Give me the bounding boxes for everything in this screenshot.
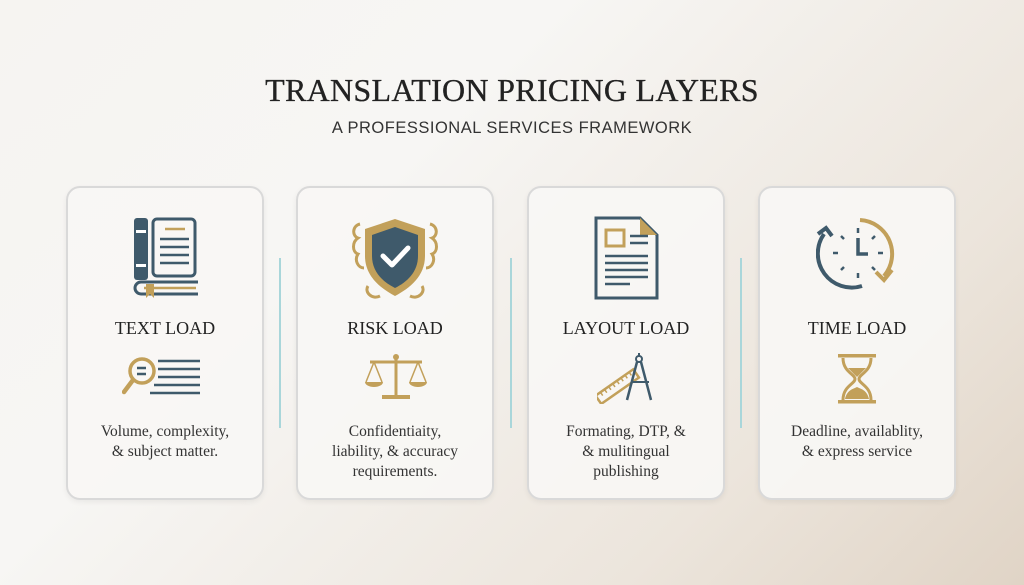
- heading: TIME LOAD: [808, 318, 906, 338]
- panel: time load: [758, 186, 956, 500]
- description: & mulitingual: [582, 443, 670, 460]
- icon: document layout: [594, 216, 658, 300]
- divider: [740, 258, 742, 428]
- description: liability, & accuracy: [332, 443, 458, 460]
- title: TRANSLATION PRICING LAYERS: [265, 72, 759, 108]
- icon: magnifier with lines: [122, 357, 200, 394]
- description: Formating, DTP, &: [566, 423, 686, 440]
- heading: TEXT LOAD: [115, 318, 215, 338]
- description: publishing: [593, 463, 659, 480]
- description: requirements.: [353, 463, 437, 480]
- icon: book with document: [134, 218, 198, 298]
- description: [332, 423, 458, 480]
- panel: layout load: [527, 186, 725, 500]
- icon: ruler and compass: [597, 353, 652, 404]
- divider: [279, 258, 281, 428]
- description: Deadline, availablity,: [791, 423, 923, 440]
- divider: [510, 258, 512, 428]
- description: Volume, complexity,: [101, 423, 229, 440]
- subtitle: A PROFESSIONAL SERVICES FRAMEWORK: [332, 119, 692, 137]
- icon: hourglass: [838, 354, 876, 404]
- icon: ornate shield with check: [352, 219, 438, 299]
- description: & express service: [802, 443, 912, 460]
- description: [566, 423, 686, 480]
- description: [101, 423, 229, 460]
- panel: text load: [66, 186, 264, 500]
- description: [791, 423, 923, 460]
- heading: RISK LOAD: [347, 318, 443, 338]
- description: & subject matter.: [112, 443, 218, 460]
- icon: clock with circular arrows: [816, 218, 894, 290]
- icon: scales: [365, 354, 427, 399]
- description: Confidentiaity,: [349, 423, 441, 440]
- panel: risk load: [296, 186, 494, 500]
- heading: LAYOUT LOAD: [563, 318, 689, 338]
